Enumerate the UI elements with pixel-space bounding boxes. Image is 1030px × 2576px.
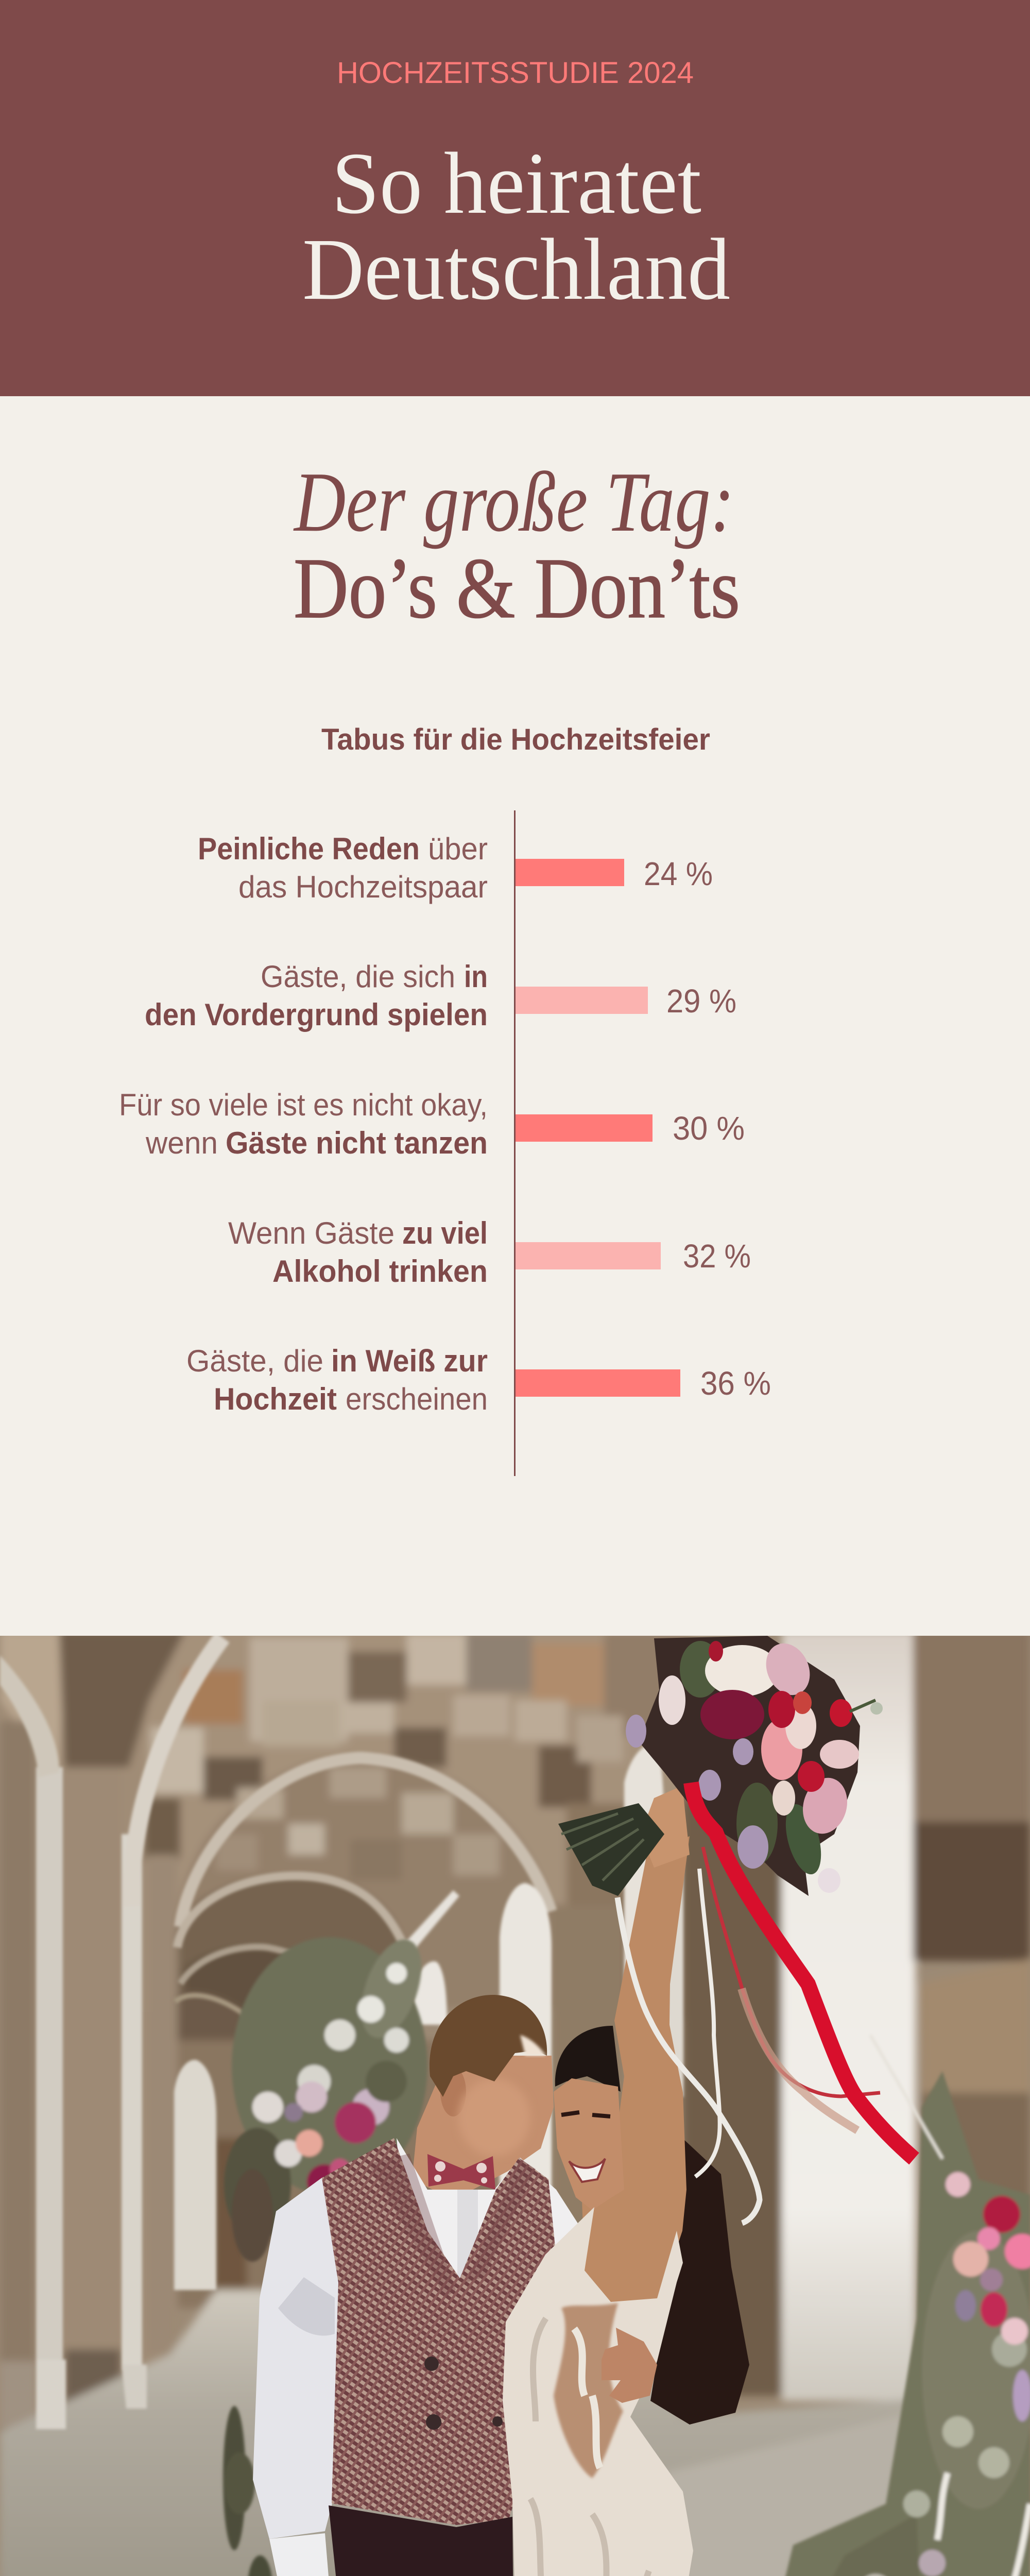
bride's bouquet <box>626 1636 883 1896</box>
ribbons <box>617 1783 914 2223</box>
bride: bouquet hand <box>641 1786 690 1868</box>
main title <box>302 134 730 318</box>
main title: Deutschland <box>302 221 730 318</box>
section heading: Do’s & Don’ts <box>294 540 740 636</box>
header panel <box>0 0 1030 396</box>
row: 24 percent: Peinliche Reden <box>198 832 420 866</box>
bar chart: wedding party taboos <box>119 810 771 1476</box>
photo detail: bright windows and column edges <box>0 1637 683 2429</box>
row: 24 percent: das Hochzeitspaar <box>238 870 488 904</box>
row: 32 percent: Alkohol trinken <box>272 1254 488 1289</box>
right flower arch <box>772 2035 1030 2576</box>
groom: hair <box>430 1995 547 2097</box>
left flower arch <box>223 1931 433 2576</box>
chart axis <box>514 810 516 1476</box>
main red ribbon <box>691 1783 914 2159</box>
bouquet: blush flowers <box>659 1636 859 1893</box>
photo background: vaults, columns and floor <box>0 1631 1030 2576</box>
row: 32 percent: zu viel <box>402 1216 488 1250</box>
bouquet: white peony <box>705 1645 779 1697</box>
row: 36 percent: in Weiß zur <box>331 1344 488 1378</box>
groom: hand on waist <box>602 2328 657 2403</box>
section heading: Der große Tag: <box>293 454 734 549</box>
groom: bow tie <box>427 2154 495 2190</box>
bouquet: lilac sprigs <box>626 1715 768 1869</box>
row: 36 percent <box>186 1344 771 1416</box>
row: 24 percent: über <box>428 832 488 866</box>
bouquet: red and magenta blooms <box>700 1641 852 1792</box>
bouquet stems <box>558 1803 664 1896</box>
groom: trousers <box>329 2505 513 2576</box>
row: 36 percent: Gäste, die <box>186 1344 323 1378</box>
thin red ribbon <box>703 1847 880 2096</box>
chart title: Tabus für die Hochzeitsfeier <box>321 723 710 756</box>
row: 29 percent: in <box>464 959 488 994</box>
row: 32 percent: 32 % <box>683 1238 751 1275</box>
row: 29 percent <box>145 959 736 1032</box>
white ribbons <box>617 1897 760 2223</box>
groom: shirt <box>253 2178 338 2539</box>
row: 30 percent: 30 % <box>673 1110 745 1147</box>
bride: lace dress <box>503 2207 693 2576</box>
row: 29 percent: den Vordergrund spielen <box>145 997 488 1032</box>
row: 24 percent: 24 % <box>644 855 713 892</box>
main title: So heiratet <box>332 134 701 232</box>
section heading <box>293 454 740 636</box>
row: 29 percent: 29 % <box>666 982 736 1020</box>
bride: face <box>554 2078 624 2210</box>
groom: vest <box>322 2138 555 2525</box>
groom: vest buttons <box>424 2357 503 2430</box>
bride: raised arm and shoulder <box>582 1836 690 2302</box>
row: 36 percent: Hochzeit <box>214 1382 337 1416</box>
groom: shirt cuff <box>269 2533 329 2576</box>
row: 30 percent: Gäste nicht tanzen <box>226 1126 488 1160</box>
bride: hair on head <box>555 2026 621 2092</box>
row: 24 percent <box>198 832 713 904</box>
row: 32 percent <box>228 1216 751 1289</box>
kicker: study label: HOCHZEITSSTUDIE 2024 <box>337 56 694 90</box>
row: 30 percent: Für so viele ist es nicht okay, <box>119 1088 488 1122</box>
row: 36 percent: erscheinen <box>346 1382 488 1416</box>
row: 29 percent: Gäste, die sich <box>261 959 455 994</box>
bride: long hair <box>650 2138 749 2425</box>
photo: bridal couple in archway <box>0 1631 1030 2576</box>
groom: face and neck <box>412 2056 554 2200</box>
row: 32 percent: Wenn Gäste <box>228 1216 394 1250</box>
row: 30 percent <box>119 1088 745 1160</box>
row: 30 percent: wenn <box>145 1126 218 1160</box>
groom <box>253 1995 579 2576</box>
bride <box>503 1786 749 2576</box>
row: 36 percent: 36 % <box>700 1365 771 1402</box>
